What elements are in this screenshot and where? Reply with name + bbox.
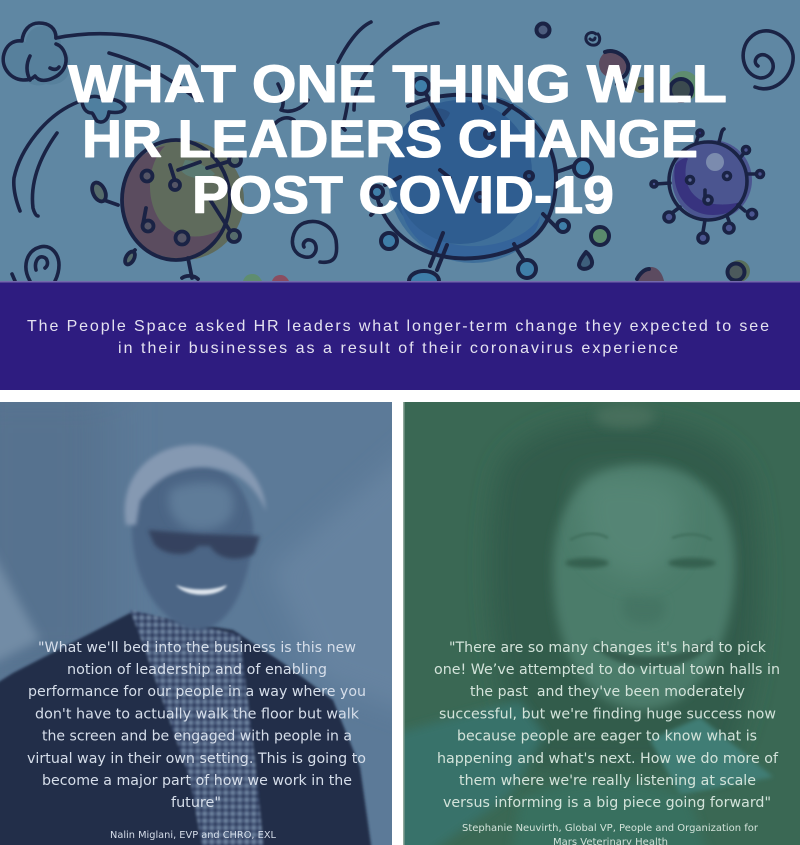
icon: purple virus — [651, 129, 764, 243]
text: attribution: Stephanie Neuvirth, Global VP, People and Organization for — [462, 823, 759, 834]
panel: quote from Nalin Miglani — [0, 402, 392, 845]
text: quote: virtual way in their own setting. This is going to — [27, 751, 366, 767]
icon: spiral centre — [272, 22, 438, 262]
text: quote — [27, 640, 366, 811]
text: quote: them where we're really listening at scale — [459, 773, 756, 789]
text: quote — [434, 640, 780, 811]
text: quote: happening and what's next. How we do more of — [437, 751, 779, 767]
text: quote: successful, but we're finding huge success now — [439, 706, 776, 722]
text: introduction: The People Space asked HR leaders what longer-term change they expected to see — [27, 318, 769, 335]
panel: quote from Stephanie Neuvirth — [390, 402, 800, 845]
text: quote: future" — [171, 795, 221, 811]
icon: blue virus — [371, 78, 592, 291]
text: quote: versus informing is a big piece going forward" — [443, 795, 771, 811]
text: quote: the screen and be engaged with people in a — [42, 728, 352, 744]
panel: introduction band — [0, 281, 800, 390]
text: attribution: Nalin Miglani, EVP and CHRO, EXL — [110, 830, 276, 841]
text: quote: notion of leadership and of enabling — [67, 662, 327, 678]
text: attribution — [462, 823, 759, 845]
text: introduction: in their businesses as a result of their coronavirus experience — [118, 340, 678, 357]
text: quote: "There are so many changes it's hard to pick — [449, 640, 767, 656]
text: quote: don't have to actually walk the floor but walk — [35, 706, 360, 722]
icon: olive virus — [89, 140, 244, 279]
title: POST COVID-19 — [192, 166, 614, 225]
text: quote: performance for our people in a way where you — [28, 684, 366, 700]
icon: small particles and spirals — [243, 24, 793, 282]
text: quote: because people are eager to know what is — [457, 728, 757, 744]
photo: portrait of Nalin Miglani — [0, 402, 392, 845]
text: quote: the past and they've been moderately — [470, 684, 745, 700]
panel: hero banner with virus illustration — [0, 0, 800, 291]
title: WHAT ONE THING WILL — [68, 55, 727, 114]
title: HR LEADERS CHANGE — [82, 110, 698, 169]
text: quote: become a major part of how we work in the — [42, 773, 352, 789]
icon: cloud and wind swirls left — [3, 23, 199, 281]
photo: portrait of Stephanie Neuvirth — [390, 402, 800, 845]
text: quote: one! We’ve attempted to do virtual town halls in — [434, 662, 780, 678]
text: quote: "What we'll bed into the business is this new — [38, 640, 356, 656]
text: introduction — [27, 318, 769, 357]
title — [68, 64, 726, 214]
